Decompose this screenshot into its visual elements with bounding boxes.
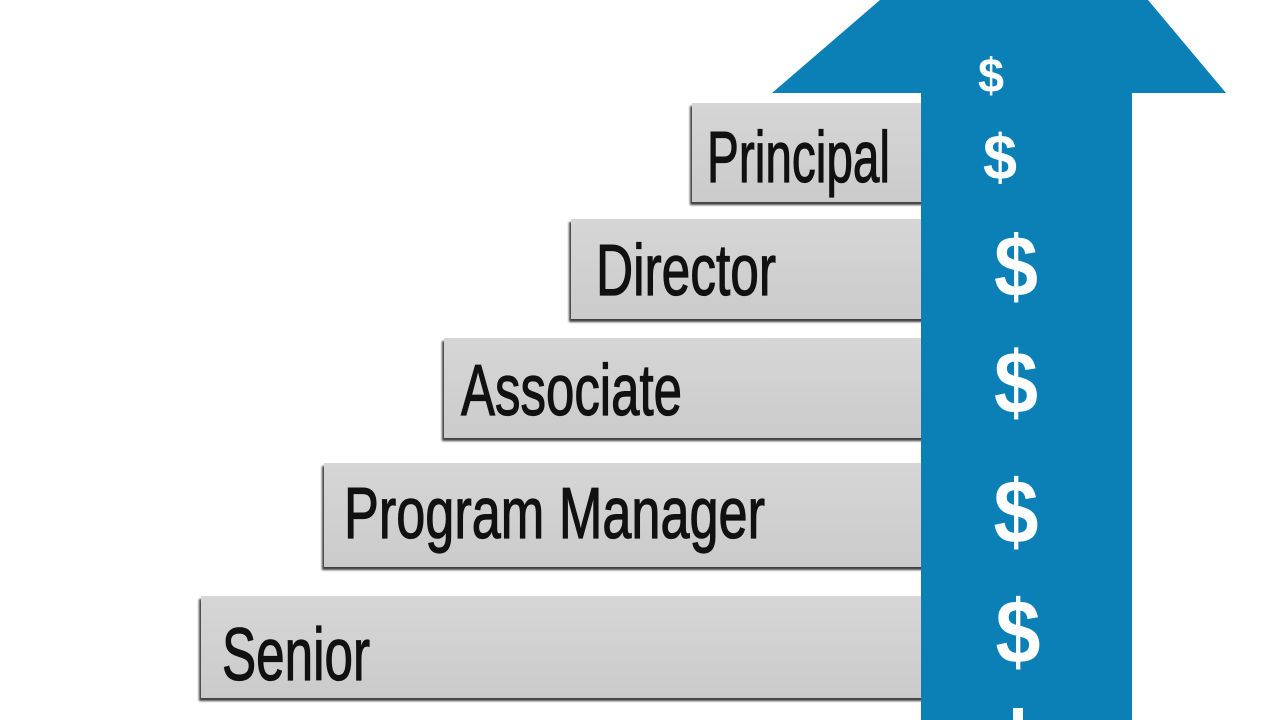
label: Director: Director — [596, 231, 776, 311]
label: Program Manager: Program Manager — [344, 474, 765, 554]
icon: dollar signs: $ — [994, 333, 1038, 432]
label: Principal: Principal — [707, 118, 890, 198]
icon: dollar signs: $ — [983, 121, 1017, 193]
label: Senior: Senior — [222, 613, 370, 696]
icon: dollar signs: $ — [994, 463, 1038, 563]
bar: Associate — [444, 338, 932, 438]
bar: Senior — [201, 596, 931, 698]
icon: dollar signs — [978, 50, 1040, 720]
bar: Principal — [692, 103, 932, 202]
arrow: rising salary — [772, 0, 1226, 720]
label: Associate: Associate — [461, 351, 682, 431]
bar: Director — [571, 219, 931, 319]
icon: dollar signs: $ — [994, 219, 1038, 315]
bar: Program Manager — [324, 463, 932, 567]
icon: dollar signs: $ — [996, 583, 1040, 683]
icon: dollar signs: $ — [978, 50, 1004, 103]
